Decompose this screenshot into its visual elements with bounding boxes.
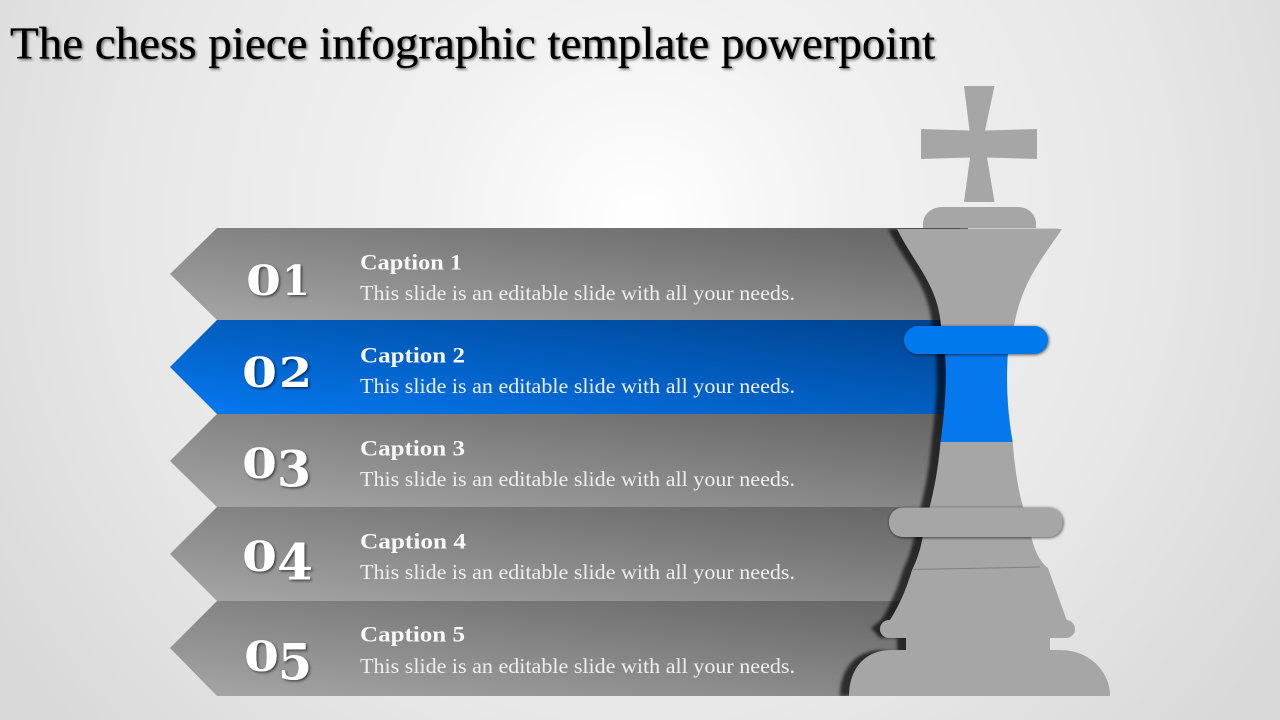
- neck: [906, 638, 1050, 652]
- piece shadow on bands: [838, 228, 960, 696]
- upper body: [897, 229, 1062, 326]
- number 01: [246, 257, 310, 305]
- crown cap: [923, 207, 1036, 228]
- caption 2: Caption 2: [360, 342, 465, 368]
- number 01: 0: [246, 257, 281, 305]
- panel: band 2 highlighted: [170, 320, 960, 414]
- seam line: [912, 567, 1040, 570]
- caption 1: Caption 1: [360, 250, 462, 274]
- cross: [921, 86, 1037, 202]
- description 3: This slide is an editable slide with all your needs.: [360, 467, 795, 491]
- number 04: [242, 532, 313, 592]
- description 4: This slide is an editable slide with all your needs.: [360, 560, 795, 584]
- foot rim: [880, 620, 1075, 638]
- number 03: 3: [277, 440, 311, 498]
- number 02: [242, 349, 312, 397]
- skirt: [890, 535, 1067, 630]
- title: The chess piece infographic template powerpoint: [10, 18, 935, 68]
- number 03: 0: [242, 440, 277, 488]
- panel: band 5: [170, 601, 960, 696]
- icon: chess king: [840, 86, 1110, 696]
- number 04: 4: [277, 532, 313, 592]
- description 5: This slide is an editable slide with all your needs.: [360, 654, 795, 678]
- crown seam: [968, 228, 1058, 229]
- gray collar: [889, 508, 1062, 537]
- description 1: This slide is an editable slide with all your needs.: [360, 281, 795, 305]
- base: [849, 650, 1110, 696]
- caption 5: Caption 5: [360, 622, 465, 646]
- caption 4: Caption 4: [360, 528, 466, 554]
- number 05: 0: [244, 633, 279, 681]
- number 05: 5: [278, 632, 312, 692]
- blue waist: [940, 352, 1013, 442]
- number 05: [244, 632, 312, 692]
- caption 3: Caption 3: [360, 436, 465, 460]
- number 01: 1: [282, 257, 310, 305]
- blue collar: [904, 326, 1048, 354]
- panel: band 4: [170, 507, 960, 601]
- panel: band 3: [170, 414, 960, 507]
- number 02: 0: [242, 349, 277, 397]
- panel: band 1: [170, 228, 968, 320]
- number 03: [242, 440, 311, 498]
- lower body: [929, 442, 1024, 510]
- number 04: 0: [242, 533, 277, 581]
- number 02: 2: [279, 349, 312, 397]
- description 2: This slide is an editable slide with all your needs.: [360, 374, 795, 398]
